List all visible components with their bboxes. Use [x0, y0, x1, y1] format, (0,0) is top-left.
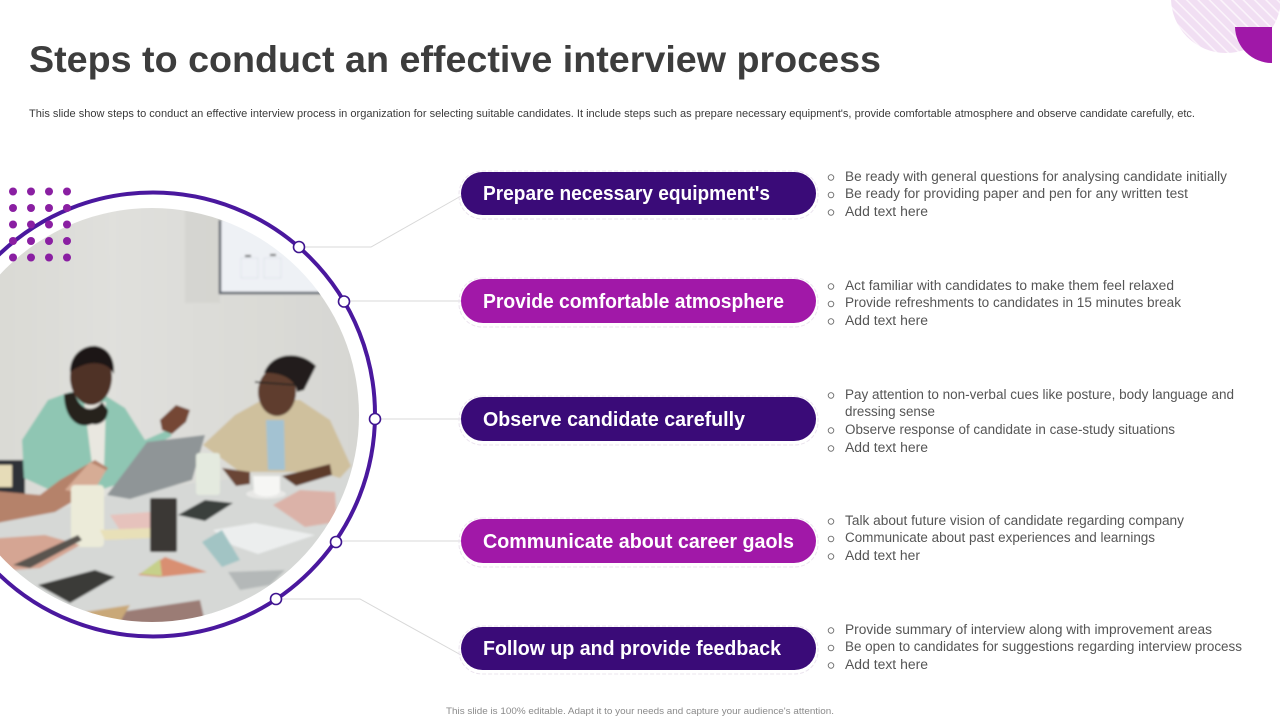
cups and objects: [0, 453, 337, 630]
step 4 pill: [459, 518, 818, 567]
ring around photo: [0, 192, 375, 636]
step 5 details: Add text here: [845, 657, 928, 672]
step 2 details: [828, 278, 1181, 328]
dot grid: [9, 188, 71, 262]
photo: interview meeting: [0, 200, 370, 640]
left arms: [0, 460, 108, 530]
title: Steps to conduct an effective interview process: [29, 39, 881, 80]
laptop: [107, 435, 205, 499]
step 1 details: Be ready with general questions for analysing candidate initially: [845, 169, 1227, 184]
right man: [203, 355, 351, 486]
ring nodes: [270, 242, 380, 604]
step 1 details: Be ready for providing paper and pen for any written test: [845, 186, 1188, 201]
connector lines: [282, 196, 461, 655]
step 3 details: dressing sense: [845, 404, 935, 419]
step 5 pill: Follow up and provide feedback: [483, 638, 782, 660]
left man: [22, 346, 190, 490]
subtitle: This slide show steps to conduct an effective interview process in organization for selecting suitable candidates. It include steps such as prepare necessary equipment's, provide comfortable atmosphere and observe candidate carefully, etc.: [29, 108, 1195, 120]
step 1 pill: Prepare necessary equipment's: [483, 183, 770, 205]
step 3 details: Add text here: [845, 440, 928, 455]
step 4 details: Communicate about past experiences and learnings: [845, 530, 1155, 545]
step 5 details: Be open to candidates for suggestions regarding interview process: [845, 639, 1242, 654]
table: [76, 491, 162, 610]
step 1 details: [828, 169, 1227, 219]
step 4 pill: Communicate about career gaols: [483, 531, 794, 553]
step 3 details: [828, 387, 1234, 455]
step 5 details: Provide summary of interview along with improvement areas: [845, 622, 1212, 637]
step 3 details: Observe response of candidate in case-study situations: [845, 422, 1175, 437]
step 3 details: Pay attention to non-verbal cues like posture, body language and: [845, 387, 1234, 402]
step 4 details: Add text her: [845, 548, 921, 563]
step 2 details: Act familiar with candidates to make them feel relaxed: [845, 278, 1174, 293]
step 1 pill: [459, 171, 818, 219]
step 1 details: Add text here: [845, 204, 928, 219]
wall screen: [220, 220, 330, 294]
step 2 details: Add text here: [845, 313, 928, 328]
step 2 details: Provide refreshments to candidates in 15 minutes break: [845, 295, 1181, 310]
step 2 pill: [459, 278, 818, 327]
step 3 pill: [459, 396, 818, 445]
step 4 details: [828, 513, 1184, 563]
footer note: This slide is 100% editable. Adapt it to your needs and capture your audience's attention.: [446, 706, 834, 717]
step 4 details: Talk about future vision of candidate regarding company: [845, 513, 1184, 528]
step 5 pill: [459, 626, 818, 674]
step 3 pill: Observe candidate carefully: [483, 409, 746, 431]
step 2 pill: Provide comfortable atmosphere: [483, 291, 784, 313]
step 5 details: [828, 622, 1242, 672]
decorative corner shape: [1171, 0, 1280, 63]
